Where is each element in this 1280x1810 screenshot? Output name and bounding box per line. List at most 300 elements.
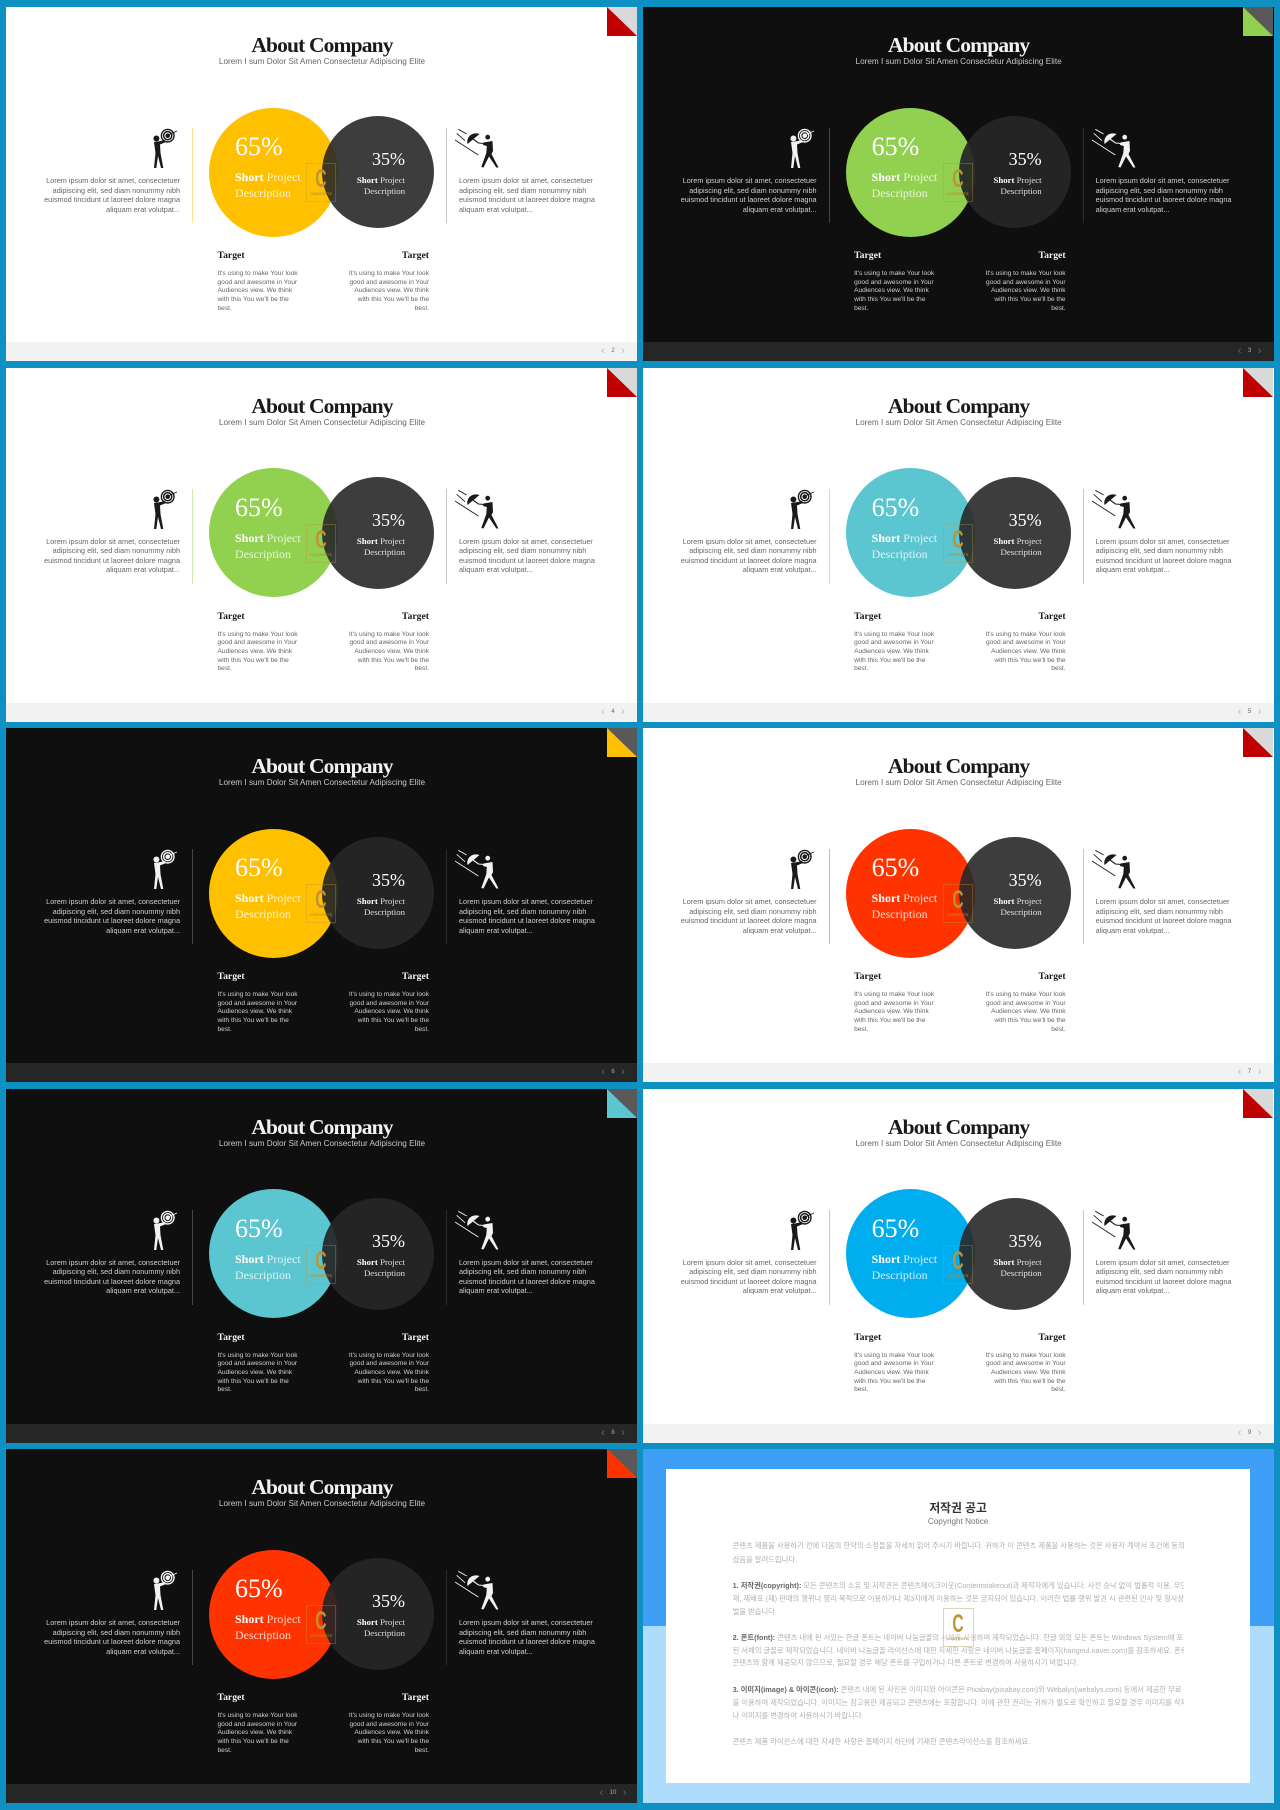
icon: person with umbrella xyxy=(1092,1210,1137,1250)
pager: ‹ 4 › xyxy=(601,706,625,718)
left text: aliquam erat volutpat... xyxy=(106,565,180,574)
target text left: Audiences view. We think xyxy=(854,1369,929,1376)
watermark: CONTENTS xyxy=(310,552,332,556)
small circle xyxy=(322,116,434,228)
target text right xyxy=(349,270,429,312)
target text right: best. xyxy=(1051,1026,1066,1033)
35 percent: 35% xyxy=(1009,149,1042,169)
target text left xyxy=(218,270,298,312)
target heading left: Target xyxy=(218,971,245,982)
right text xyxy=(459,536,595,574)
target text left: with this You we'll be the xyxy=(854,296,925,303)
target text right: Audiences view. We think xyxy=(354,1008,429,1015)
left text: adipiscing elit, sed diam nonummy nibh xyxy=(689,907,817,916)
small circle xyxy=(959,116,1071,228)
target text left: Audiences view. We think xyxy=(854,648,929,655)
target text left: with this You we'll be the xyxy=(218,1738,289,1745)
small circle xyxy=(959,1198,1071,1310)
left divider xyxy=(192,849,193,944)
closing note: 콘텐츠 제품 라이선스에 대한 자세한 사항은 홈페이지 하단에 기재한 콘텐츠라이선스를 참조하세요. xyxy=(733,1737,1030,1746)
watermark: CONTENTS xyxy=(947,1636,969,1641)
icon: person with umbrella xyxy=(455,1570,500,1610)
left text: aliquam erat volutpat... xyxy=(106,205,180,214)
right text: Lorem ipsum dolor sit amet, consectetuer xyxy=(459,1618,593,1627)
target text right: with this You we'll be the xyxy=(994,1017,1066,1024)
target text left: Audiences view. We think xyxy=(218,648,292,655)
target text left: with this You we'll be the xyxy=(854,657,925,664)
65 percent: 65% xyxy=(235,853,283,882)
left text: adipiscing elit, sed diam nonummy nibh xyxy=(53,907,180,916)
target text left: with this You we'll be the xyxy=(218,296,289,303)
left text xyxy=(10,1618,180,1656)
pager: ‹ 10 › xyxy=(599,1787,627,1799)
right text: adipiscing elit, sed diam nonummy nibh xyxy=(1096,546,1223,555)
watermark xyxy=(943,884,973,923)
watermark: C xyxy=(952,1610,963,1638)
left text: aliquam erat volutpat... xyxy=(106,1647,180,1656)
65 percent: 65% xyxy=(235,132,283,161)
title: About Company xyxy=(888,1114,1029,1138)
watermark xyxy=(306,524,336,562)
right text xyxy=(459,1618,629,1656)
65 percent: 65% xyxy=(872,853,919,882)
left divider xyxy=(829,849,830,944)
left divider xyxy=(829,488,830,584)
right divider xyxy=(446,128,447,223)
left text xyxy=(44,897,180,935)
target text right: with this You we'll be the xyxy=(358,1378,429,1385)
small circle label xyxy=(345,1617,405,1639)
right text: adipiscing elit, sed diam nonummy nibh xyxy=(1096,1267,1223,1276)
panel: slide 7 light orange xyxy=(643,728,1274,1082)
left text xyxy=(44,536,180,574)
title: About Company xyxy=(251,1475,393,1499)
target text right: good and awesome in Your xyxy=(349,639,429,646)
large circle label xyxy=(235,1250,315,1282)
small circle xyxy=(322,1198,434,1310)
target text left: It's using to make Your look xyxy=(854,1352,934,1358)
right divider xyxy=(446,849,447,944)
icon: person with umbrella xyxy=(1092,490,1136,528)
subtitle: Lorem I sum Dolor Sit Amen Consectetur Adipiscing Elite xyxy=(219,778,425,787)
large circle label: Description xyxy=(235,1628,291,1642)
right text xyxy=(459,897,595,935)
target heading left: Target xyxy=(218,1332,245,1342)
clause 1: 1. 저작권(copyright): 모든 콘텐츠의 소유 및 저작권은 콘텐츠메이크아웃(Contentstakeout)과 제작자에게 있습니다. 사전 승낙 없이 법률적 이용, 무단전 xyxy=(733,1581,1184,1590)
pager: ‹ 3 › xyxy=(1238,345,1261,357)
target heading left: Target xyxy=(218,610,245,622)
left text xyxy=(647,897,817,935)
target text right: Audiences view. We think xyxy=(991,287,1066,294)
large circle label: Short Project xyxy=(235,1612,301,1626)
right divider xyxy=(1083,488,1084,584)
large circle label xyxy=(235,890,315,922)
large circle label: Short Project xyxy=(235,1252,301,1266)
icon: person with target xyxy=(153,128,178,168)
target text right: with this You we'll be the xyxy=(994,1378,1066,1385)
left divider xyxy=(192,128,193,223)
title: About Company xyxy=(251,394,393,418)
small circle xyxy=(959,837,1071,949)
large circle label xyxy=(235,1611,315,1643)
target heading right: Target xyxy=(402,250,429,261)
target heading left: Target xyxy=(854,250,881,261)
watermark: CONTENTS xyxy=(310,191,332,196)
large circle label: Short Project xyxy=(872,1252,937,1266)
footer bar xyxy=(6,702,637,722)
target text left: best. xyxy=(218,1747,232,1754)
target heading right: Target xyxy=(402,1692,429,1703)
small circle label: Short Project xyxy=(357,1256,405,1266)
right text: euismod tincidunt ut laoreet dolore magna xyxy=(459,556,595,565)
pager: ‹ 5 › xyxy=(1238,706,1261,718)
right text: aliquam erat volutpat... xyxy=(459,1647,533,1656)
target text right: with this You we'll be the xyxy=(358,1738,429,1745)
right text: euismod tincidunt ut laoreet dolore magna xyxy=(459,1277,595,1286)
left text: adipiscing elit, sed diam nonummy nibh xyxy=(53,546,180,555)
icon: person with target xyxy=(790,1210,815,1250)
target text left: Audiences view. We think xyxy=(218,1369,292,1376)
target text right: Audiences view. We think xyxy=(991,1008,1066,1015)
small circle label: Description xyxy=(1001,1268,1042,1278)
small circle label: Short Project xyxy=(357,536,405,546)
large circle label xyxy=(235,530,301,560)
right text: Lorem ipsum dolor sit amet, consectetuer xyxy=(459,897,593,906)
corner fold xyxy=(606,368,636,396)
watermark: CONTENTS xyxy=(947,191,969,196)
target text right: best. xyxy=(415,1386,429,1393)
left divider xyxy=(829,1210,830,1304)
large circle label xyxy=(872,1250,952,1282)
target text right: best. xyxy=(1051,1386,1066,1393)
left text: adipiscing elit, sed diam nonummy nibh xyxy=(689,546,817,555)
right text xyxy=(459,176,595,214)
target text right: best. xyxy=(415,1026,429,1033)
corner fold xyxy=(606,728,636,757)
footer bar xyxy=(643,1063,1274,1082)
target text left: best. xyxy=(854,305,868,312)
small circle label: Description xyxy=(364,907,405,917)
target text right: Audiences view. We think xyxy=(354,1729,429,1736)
large circle label: Description xyxy=(235,1268,291,1282)
small circle xyxy=(322,1558,434,1670)
target text left: good and awesome in Your xyxy=(854,1000,934,1007)
footer bar xyxy=(643,342,1274,361)
right text: Lorem ipsum dolor sit amet, consectetuer xyxy=(459,1258,593,1266)
corner fold xyxy=(606,7,636,36)
target text left: with this You we'll be the xyxy=(854,1017,925,1024)
subtitle: Lorem I sum Dolor Sit Amen Consectetur Adipiscing Elite xyxy=(856,57,1062,66)
icon: person with target xyxy=(790,490,814,529)
large circle xyxy=(209,828,338,958)
large circle xyxy=(846,108,975,236)
right text: euismod tincidunt ut laoreet dolore magna xyxy=(459,195,595,204)
target text left xyxy=(854,630,934,672)
right text: euismod tincidunt ut laoreet dolore magna xyxy=(459,916,595,925)
small circle label: Description xyxy=(1001,546,1042,556)
left text: aliquam erat volutpat... xyxy=(743,565,817,574)
target text right: It's using to make Your look xyxy=(349,270,429,277)
target text right: with this You we'll be the xyxy=(994,296,1066,303)
right text: Lorem ipsum dolor sit amet, consectetuer xyxy=(459,536,593,546)
watermark xyxy=(306,884,336,923)
large circle label: Description xyxy=(872,907,928,921)
right text: adipiscing elit, sed diam nonummy nibh xyxy=(459,907,586,916)
icon: person with umbrella xyxy=(455,490,498,528)
left text: euismod tincidunt ut laoreet dolore magna xyxy=(44,195,180,204)
small circle label: Short Project xyxy=(993,536,1042,546)
target text left: It's using to make Your look xyxy=(854,630,934,638)
watermark xyxy=(306,1244,336,1284)
left text: Lorem ipsum dolor sit amet, consectetuer xyxy=(46,1258,180,1266)
large circle label: Description xyxy=(872,186,928,200)
small circle label: Short Project xyxy=(357,896,405,906)
target text left: best. xyxy=(854,1386,868,1393)
left text: Lorem ipsum dolor sit amet, consectetuer xyxy=(683,536,817,546)
large circle label xyxy=(872,890,952,922)
35 percent: 35% xyxy=(372,1591,405,1611)
target text left: best. xyxy=(218,665,232,672)
target text right: Audiences view. We think xyxy=(991,648,1066,655)
large circle label: Short Project xyxy=(235,530,301,544)
watermark: CONTENTS xyxy=(310,912,332,917)
large circle label: Description xyxy=(235,186,291,200)
icon: person with umbrella xyxy=(1092,849,1137,889)
target text right: good and awesome in Your xyxy=(349,1360,429,1367)
right text: adipiscing elit, sed diam nonummy nibh xyxy=(1096,186,1223,195)
right text: adipiscing elit, sed diam nonummy nibh xyxy=(459,1267,586,1276)
target text left xyxy=(218,1352,308,1395)
large circle xyxy=(846,468,975,597)
subtitle: Lorem I sum Dolor Sit Amen Consectetur Adipiscing Elite xyxy=(856,778,1062,787)
icon: person with target xyxy=(153,850,178,889)
watermark xyxy=(306,163,336,202)
lower background band xyxy=(643,1626,1274,1803)
watermark: CONTENTS xyxy=(947,912,969,917)
right text xyxy=(459,1258,629,1296)
panel: copyright notice xyxy=(643,1449,1274,1803)
large circle xyxy=(209,1189,338,1318)
target heading left: Target xyxy=(854,971,881,982)
notice subtitle: Copyright Notice xyxy=(928,1517,988,1526)
target text right: with this You we'll be the xyxy=(994,657,1066,664)
title: About Company xyxy=(888,33,1029,57)
65 percent: 65% xyxy=(235,1214,283,1242)
icon: person with umbrella xyxy=(1092,128,1136,168)
right divider xyxy=(446,488,447,584)
target heading left: Target xyxy=(854,610,881,622)
target text left: Audiences view. We think xyxy=(218,287,292,294)
35 percent: 35% xyxy=(1009,1230,1042,1250)
left text: aliquam erat volutpat... xyxy=(743,926,817,935)
target text left: It's using to make Your look xyxy=(218,630,298,638)
icon: person with target xyxy=(790,128,814,168)
watermark xyxy=(943,524,973,562)
target text right: good and awesome in Your xyxy=(986,1000,1066,1007)
target text left xyxy=(854,270,934,312)
target text left: good and awesome in Your xyxy=(854,1360,934,1367)
target heading right: Target xyxy=(402,1332,429,1342)
left text: aliquam erat volutpat... xyxy=(743,205,817,214)
target text right: It's using to make Your look xyxy=(349,1712,429,1719)
right text xyxy=(1096,176,1232,214)
35 percent: 35% xyxy=(372,510,405,530)
target text right: with this You we'll be the xyxy=(358,657,429,664)
corner fold xyxy=(1243,728,1273,757)
large circle label xyxy=(235,170,301,200)
target text right: It's using to make Your look xyxy=(986,270,1066,277)
target text right: It's using to make Your look xyxy=(986,630,1066,638)
target text left: It's using to make Your look xyxy=(218,270,298,277)
target text right: good and awesome in Your xyxy=(986,1360,1066,1367)
footer bar xyxy=(6,1063,637,1082)
notice intro: 콘텐츠 제품을 사용하기 전에 다음의 한약의 소정들을 자세히 읽어 주시기 바랍니다. 귀하가 이 콘텐츠 제품을 사용하는 것은 사용자 계약서 조건에 동의하 xyxy=(733,1541,1184,1550)
icon: person with umbrella xyxy=(455,128,498,168)
subtitle: Lorem I sum Dolor Sit Amen Consectetur Adipiscing Elite xyxy=(856,418,1062,426)
target text right: It's using to make Your look xyxy=(349,630,429,638)
small circle label xyxy=(993,175,1042,196)
target text right: It's using to make Your look xyxy=(986,1352,1066,1358)
right text: adipiscing elit, sed diam nonummy nibh xyxy=(459,1628,586,1637)
left text: Lorem ipsum dolor sit amet, consectetuer xyxy=(683,1258,817,1266)
large circle label: Description xyxy=(235,546,291,560)
title: About Company xyxy=(888,394,1029,418)
target text left: It's using to make Your look xyxy=(218,1712,298,1719)
left divider xyxy=(192,488,193,584)
target text right: Audiences view. We think xyxy=(354,1369,429,1376)
target text left: good and awesome in Your xyxy=(218,639,297,646)
target text left: good and awesome in Your xyxy=(854,639,934,646)
panel: slide 6 dark yellow xyxy=(6,728,637,1082)
target text left: best. xyxy=(218,1386,232,1393)
target text right xyxy=(339,1352,429,1395)
target text right xyxy=(976,1352,1066,1395)
left divider xyxy=(192,1210,193,1304)
watermark: C xyxy=(952,526,963,554)
target text left: It's using to make Your look xyxy=(218,1352,298,1358)
subtitle: Lorem I sum Dolor Sit Amen Consectetur Adipiscing Elite xyxy=(219,418,425,426)
pager: ‹ 6 › xyxy=(601,1066,625,1078)
target text right: Audiences view. We think xyxy=(991,1369,1066,1376)
left text: euismod tincidunt ut laoreet dolore magna xyxy=(44,916,180,925)
target heading right: Target xyxy=(1038,250,1066,261)
right text: aliquam erat volutpat... xyxy=(459,1286,533,1295)
watermark xyxy=(306,1605,336,1644)
35 percent: 35% xyxy=(1009,870,1042,890)
right text: aliquam erat volutpat... xyxy=(459,205,533,214)
left text xyxy=(44,176,180,214)
target text right: best. xyxy=(415,665,429,672)
target text left: good and awesome in Your xyxy=(218,1360,297,1367)
target text right: best. xyxy=(415,1747,429,1754)
target heading right: Target xyxy=(402,971,429,982)
icon: person with target xyxy=(790,849,815,889)
corner fold xyxy=(606,1449,636,1478)
clause 2 line 3: 콘텐츠와 함께 제공되지 않으므로, 필요할 경우 해당 폰트를 구입하거나 다른 폰트로 변경하여 사용하시기 바랍니다. xyxy=(733,1658,1079,1667)
target text right: It's using to make Your look xyxy=(349,1352,429,1358)
clause 3 line 3: 나 이미지를 변경하여 사용하시기 바랍니다. xyxy=(733,1711,864,1720)
icon: person with target xyxy=(153,1210,178,1250)
left text: adipiscing elit, sed diam nonummy nibh xyxy=(53,1267,180,1276)
large circle label: Short Project xyxy=(872,891,937,905)
right text: aliquam erat volutpat... xyxy=(459,565,533,574)
watermark: C xyxy=(952,886,963,914)
large circle xyxy=(846,1189,975,1318)
right text: euismod tincidunt ut laoreet dolore magna xyxy=(1096,1277,1231,1286)
large circle xyxy=(209,468,338,597)
target text right: with this You we'll be the xyxy=(358,296,429,303)
pager: ‹ 2 › xyxy=(601,345,625,357)
corner fold xyxy=(606,1088,636,1118)
watermark: CONTENTS xyxy=(947,1272,969,1278)
left text: Lorem ipsum dolor sit amet, consectetuer xyxy=(46,176,180,185)
large circle xyxy=(846,828,975,958)
watermark: C xyxy=(315,526,327,554)
target text right xyxy=(986,630,1066,672)
large circle label: Short Project xyxy=(235,891,301,905)
icon: person with target xyxy=(153,1570,178,1610)
watermark: C xyxy=(315,1246,327,1274)
65 percent: 65% xyxy=(872,1214,919,1242)
small circle label: Description xyxy=(364,1628,405,1638)
white notice card xyxy=(666,1469,1250,1783)
right text: Lorem ipsum dolor sit amet, consectetuer xyxy=(1096,1258,1229,1266)
right text xyxy=(1096,897,1266,935)
left text: aliquam erat volutpat... xyxy=(106,926,180,935)
target text left: It's using to make Your look xyxy=(854,270,934,277)
target text left xyxy=(854,1352,944,1395)
target text right xyxy=(349,630,429,672)
pager: ‹ 7 › xyxy=(1238,1066,1261,1078)
small circle label xyxy=(345,896,405,918)
watermark: C xyxy=(315,886,327,914)
small circle label: Description xyxy=(364,1268,405,1278)
footer bar xyxy=(6,342,637,361)
watermark: CONTENTS xyxy=(947,552,969,556)
target text left: good and awesome in Your xyxy=(218,279,297,286)
target text left: best. xyxy=(854,665,868,672)
icon: person with umbrella xyxy=(455,1210,500,1250)
target heading left: Target xyxy=(854,1332,881,1342)
left text: euismod tincidunt ut laoreet dolore magna xyxy=(681,195,817,204)
left text: Lorem ipsum dolor sit amet, consectetuer xyxy=(683,897,817,906)
left text: euismod tincidunt ut laoreet dolore magna xyxy=(44,1277,180,1286)
corner fold xyxy=(1243,368,1273,396)
panel: slide 8 dark teal xyxy=(6,1088,637,1442)
right text xyxy=(1096,536,1232,574)
target text left: best. xyxy=(218,1026,232,1033)
target text left: best. xyxy=(854,1026,868,1033)
left text xyxy=(647,1258,817,1296)
left text: adipiscing elit, sed diam nonummy nibh xyxy=(689,186,817,195)
watermark xyxy=(943,1608,974,1647)
target text right: It's using to make Your look xyxy=(349,991,429,998)
small circle label xyxy=(993,536,1042,557)
target text left: with this You we'll be the xyxy=(218,1378,289,1385)
target text right: best. xyxy=(415,305,429,312)
left text: aliquam erat volutpat... xyxy=(106,1286,180,1295)
target text left xyxy=(218,991,308,1035)
corner fold xyxy=(1243,1088,1273,1118)
watermark: CONTENTS xyxy=(310,1633,332,1638)
65 percent: 65% xyxy=(235,492,283,522)
left text: euismod tincidunt ut laoreet dolore magna xyxy=(681,556,817,565)
footer bar xyxy=(643,702,1274,722)
panel: slide 2 light yellow xyxy=(6,7,637,361)
target text right: best. xyxy=(1051,305,1066,312)
right text: aliquam erat volutpat... xyxy=(1096,565,1169,574)
title: About Company xyxy=(888,754,1029,778)
